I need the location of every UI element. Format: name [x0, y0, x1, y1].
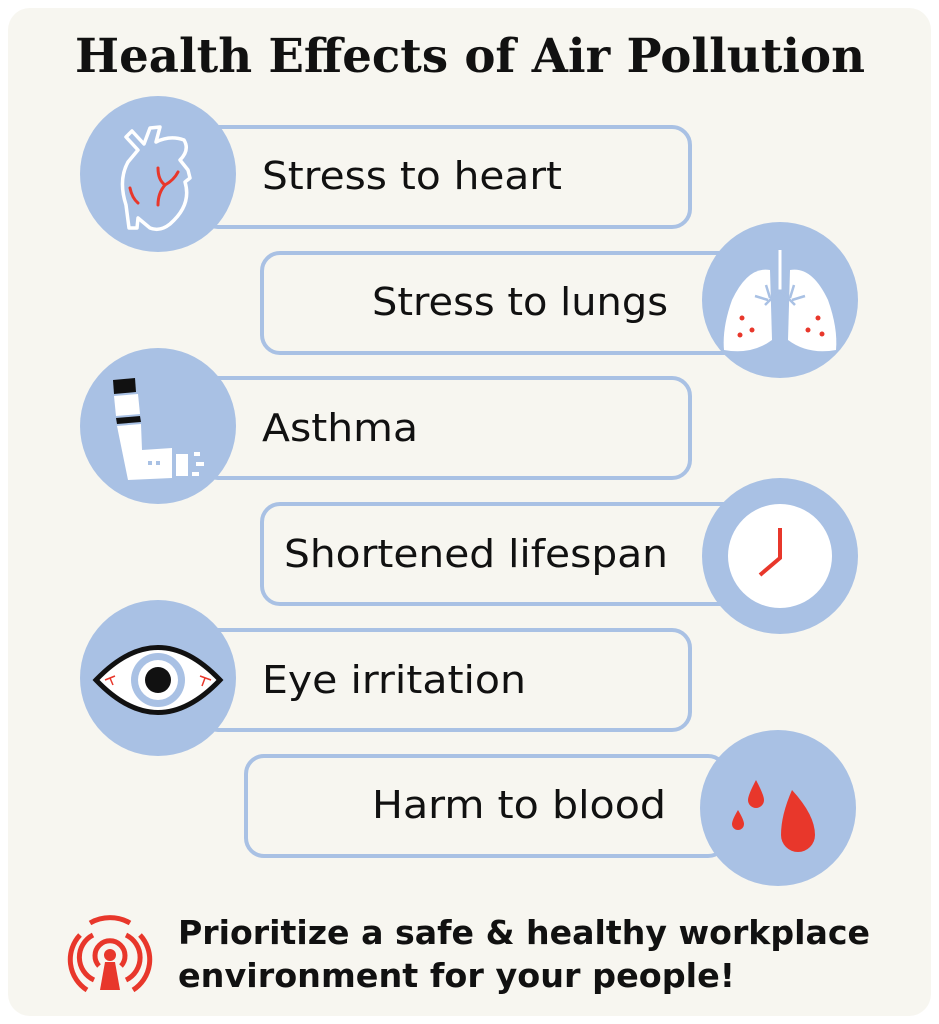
row: harm to blood	[246, 730, 856, 886]
callout text: Prioritize a safe & healthy workplace	[178, 913, 870, 952]
row: eye irritation: Eye irritation	[262, 658, 526, 702]
row: shortened lifespan	[262, 478, 858, 634]
callout text	[178, 913, 870, 995]
icon: blood drops	[732, 780, 815, 852]
icon: clock	[728, 504, 832, 608]
row: stress to lungs: Stress to lungs	[372, 280, 668, 324]
icon: eye	[96, 648, 220, 712]
icon: signal	[70, 918, 150, 990]
title: Health Effects of Air Pollution	[75, 29, 865, 84]
callout text: environment for your people!	[178, 956, 735, 995]
icon: lungs	[724, 250, 836, 351]
row: asthma	[80, 348, 690, 504]
row: stress to heart: Stress to heart	[262, 154, 562, 198]
row: harm to blood: Harm to blood	[372, 783, 666, 827]
row: shortened lifespan: Shortened lifespan	[284, 532, 668, 576]
row: stress to lungs	[262, 222, 858, 378]
row: stress to heart	[80, 96, 690, 252]
icon: inhaler	[113, 378, 204, 480]
icon: heart	[122, 127, 190, 229]
row: eye irritation	[80, 600, 690, 756]
row: asthma: Asthma	[262, 406, 418, 450]
